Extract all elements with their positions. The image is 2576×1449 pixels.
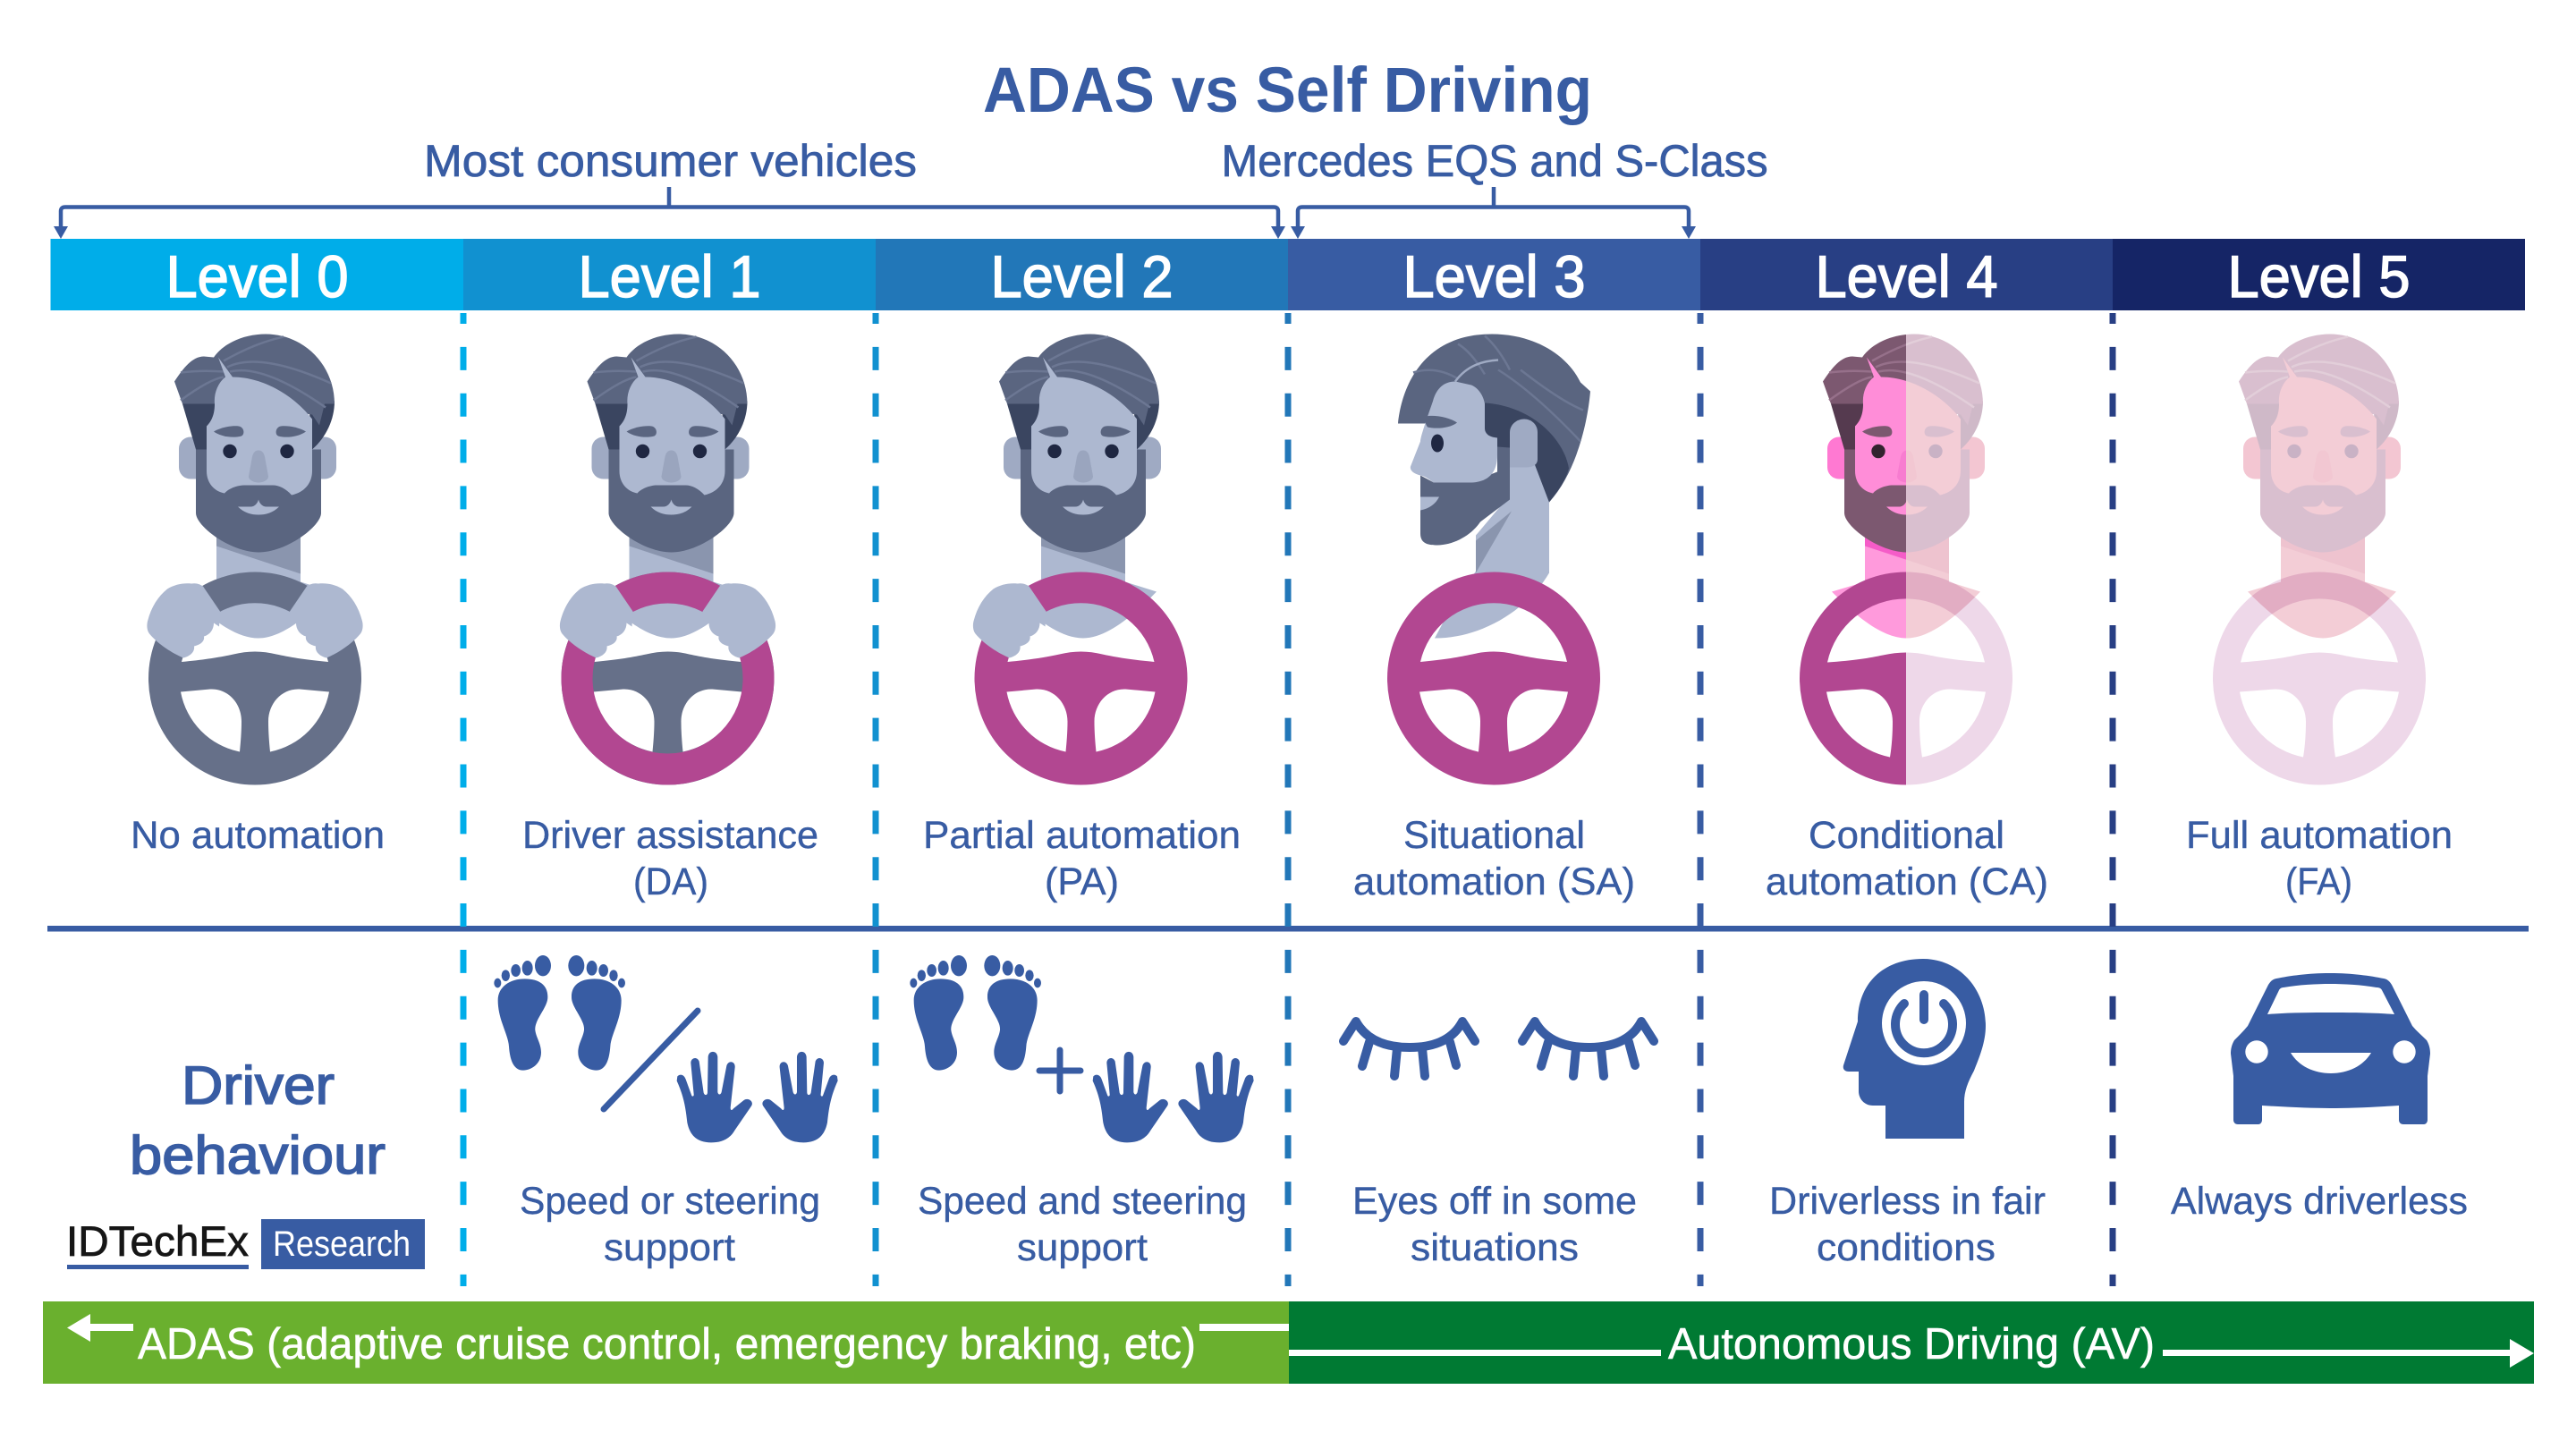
caption: speed or steering support: support [604, 1226, 735, 1269]
logo: IDTechEx Research [66, 1217, 425, 1269]
caption: no automation: No automation [131, 814, 385, 857]
icon: closed eyes [1343, 1021, 1654, 1076]
driver illustration: level 1, pink ring [560, 335, 775, 785]
icon: car [2231, 973, 2430, 1124]
header: Level 0: Level 0 [166, 243, 349, 309]
driver illustration: level 5, faded [2213, 335, 2426, 785]
caption: situational automation: Situational [1403, 814, 1585, 857]
icon: feet or hands [494, 955, 838, 1142]
header: Level 0 [50, 239, 463, 310]
caption: partial automation: (PA) [1045, 860, 1119, 903]
caption: conditional automation: automation (CA) [1766, 860, 2048, 903]
caption: conditional automation [1766, 814, 2048, 903]
driver illustration: level 0, both hands on gray wheel [147, 335, 363, 785]
header: Level 2 [876, 239, 1288, 310]
driver illustration: level 3, side profile [1387, 335, 1600, 785]
caption: speed and steering support: Speed and steering [918, 1180, 1247, 1223]
bracket: Mercedes EQS and S-Class [1222, 136, 1767, 239]
caption: driver assistance: Driver assistance [522, 814, 818, 857]
heading: driver behaviour [130, 1055, 386, 1185]
heading: driver behaviour: behaviour [130, 1125, 386, 1185]
caption: always driverless: Always driverless [2171, 1180, 2468, 1223]
caption: full automation [2186, 814, 2453, 903]
bracket: most consumer vehicles: Most consumer vehicles [424, 136, 917, 186]
header: Level 4: Level 4 [1816, 243, 1998, 309]
caption: driverless in fair conditions: Driverless in fair [1769, 1180, 2046, 1223]
caption: driverless in fair conditions [1769, 1180, 2046, 1269]
title: ADAS vs Self Driving [983, 55, 1592, 126]
caption: driverless in fair conditions: conditions [1817, 1226, 1996, 1269]
caption: driver assistance: (DA) [633, 860, 708, 903]
header: Level 5: Level 5 [2227, 243, 2410, 309]
band: ADAS [43, 1301, 1289, 1384]
caption: partial automation [923, 814, 1241, 903]
caption: speed and steering support [918, 1180, 1247, 1269]
caption: driver assistance [522, 814, 818, 903]
band: Autonomous Driving [1289, 1301, 2534, 1384]
band: ADAS: ADAS (adaptive cruise control, emergency braking, etc) [138, 1320, 1196, 1368]
caption: eyes off: situations [1411, 1226, 1579, 1269]
caption: speed or steering support [520, 1180, 820, 1269]
caption: full automation: (FA) [2285, 860, 2352, 903]
caption: speed and steering support: support [1017, 1226, 1148, 1269]
caption: eyes off [1352, 1180, 1637, 1269]
caption: full automation: Full automation [2186, 814, 2453, 857]
header: Level 3 [1288, 239, 1700, 310]
header: Level 4 [1700, 239, 2113, 310]
header: Level 2: Level 2 [991, 243, 1174, 309]
header: Level 1: Level 1 [578, 243, 760, 309]
logo: IDTechEx Research: IDTechEx [66, 1217, 249, 1265]
header: Level 1 [463, 239, 876, 310]
caption: speed or steering support: Speed or steering [520, 1180, 820, 1223]
heading: driver behaviour: Driver [182, 1055, 335, 1115]
header: Level 3: Level 3 [1402, 243, 1585, 309]
caption: partial automation: Partial automation [923, 814, 1241, 857]
driver illustration: level 2, pink wheel one hand [973, 335, 1188, 785]
horizontal divider [47, 926, 2529, 932]
driver illustration: level 4, half person half faded [1800, 335, 2012, 785]
bracket: most consumer vehicles [54, 136, 1285, 239]
band: Autonomous Driving: Autonomous Driving (AV) [1668, 1320, 2155, 1368]
caption: eyes off: Eyes off in some [1352, 1180, 1637, 1223]
logo: IDTechEx Research: Research [273, 1224, 411, 1264]
icon: feet and hands [910, 955, 1254, 1142]
caption: conditional automation: Conditional [1809, 814, 2004, 857]
icon: head with power symbol [1843, 959, 1986, 1139]
caption: situational automation: automation (SA) [1353, 860, 1635, 903]
header: Level 5 [2113, 239, 2525, 310]
caption: situational automation [1353, 814, 1635, 903]
bracket: Mercedes EQS and S-Class: Mercedes EQS and S-Class [1222, 136, 1767, 186]
